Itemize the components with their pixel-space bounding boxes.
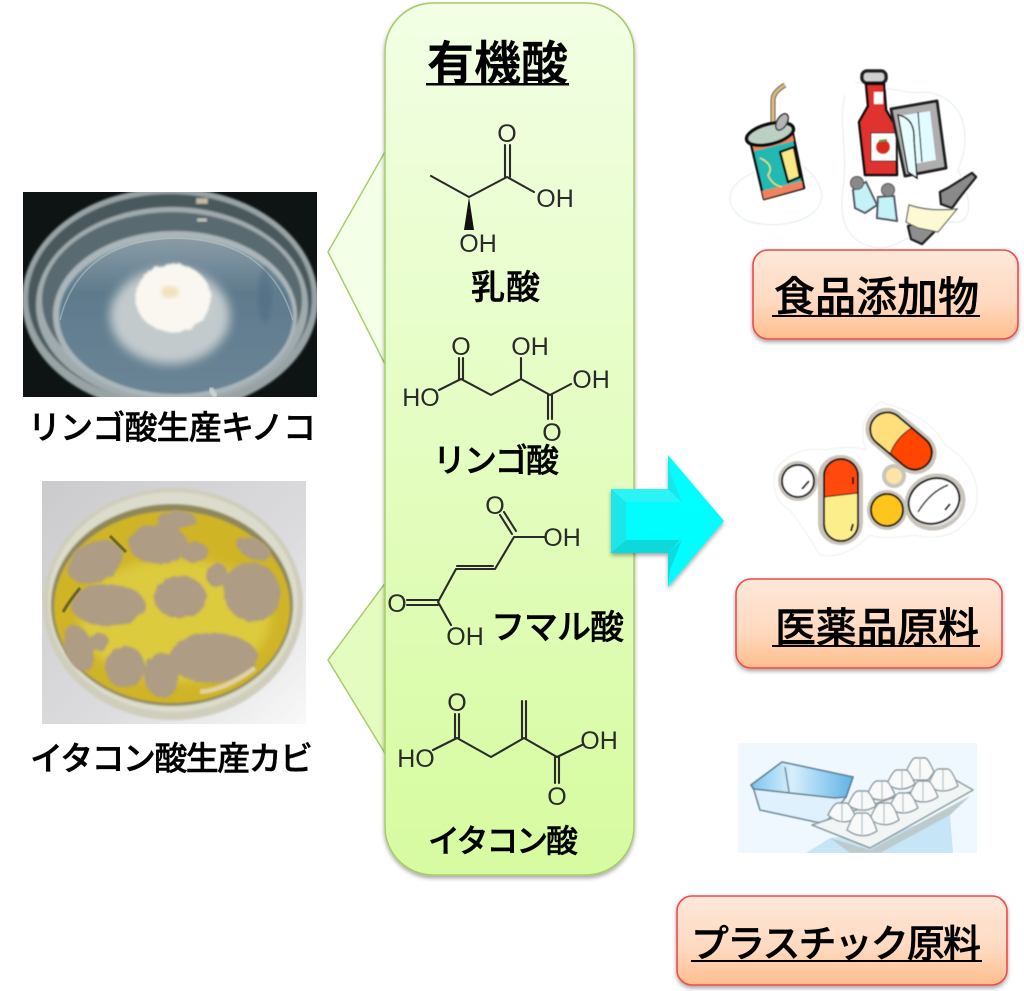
image: plastic tray and egg carton <box>738 743 977 853</box>
box: plastic raw materials <box>677 896 1007 985</box>
structure: itaconic acid: HO <box>397 745 435 773</box>
box: pharmaceutical raw materials <box>736 579 1002 668</box>
panel: organic acids <box>385 3 634 875</box>
icon: food and drink clip art <box>730 71 976 248</box>
salt and pepper shakers <box>850 176 897 221</box>
label: malic acid: リンゴ酸 <box>433 442 559 479</box>
egg carton <box>812 758 973 853</box>
label: lactic acid: 乳酸 <box>471 269 540 307</box>
faint outline <box>774 402 977 556</box>
structure: malic acid: OH <box>511 333 549 361</box>
structure: malic acid: OH <box>572 366 610 394</box>
label: fumaric acid: フマル酸 <box>491 609 624 647</box>
structure: malic acid: O <box>542 419 562 447</box>
photo: itaconic acid mold dish <box>42 481 306 724</box>
arrow: to applications <box>611 455 724 587</box>
structure: malic acid: HO <box>402 384 440 412</box>
structure: malic acid <box>402 333 610 447</box>
fork and napkin <box>906 173 976 244</box>
small pill <box>884 466 904 486</box>
heading: organic acid: 有機酸 <box>427 37 568 90</box>
box: pharmaceutical raw materials: 医薬品原料 <box>775 605 979 651</box>
box: food additives <box>753 250 1018 339</box>
structure: fumaric acid <box>387 492 581 651</box>
callout wedge: top <box>328 150 386 366</box>
faint outlines <box>730 82 969 248</box>
caption: itaconic acid mold: イタコン酸生産カビ <box>30 740 313 777</box>
plastic tray <box>751 762 853 824</box>
structure: lactic acid <box>431 120 574 258</box>
ketchup bottle <box>859 71 897 175</box>
structure: itaconic acid: O <box>547 783 567 811</box>
structure: itaconic acid <box>397 689 618 811</box>
structure: lactic acid: O <box>497 120 517 148</box>
photo: malic acid mushroom dish <box>22 188 318 412</box>
structure: fumaric acid: OH <box>543 524 581 552</box>
box: plastic raw materials: プラスチック原料 <box>691 924 981 966</box>
callout wedge: bottom <box>328 582 386 755</box>
vertical capsule <box>818 455 863 545</box>
white pill <box>778 461 818 501</box>
panel background <box>385 3 634 875</box>
orange pill <box>867 490 907 530</box>
diagonal capsule <box>857 399 945 483</box>
caption: malic acid mushroom: リンゴ酸生産キノコ <box>28 409 316 446</box>
structure: lactic acid: OH <box>536 185 574 213</box>
structure: malic acid: O <box>451 333 471 361</box>
napkin holder <box>891 101 946 178</box>
box: food additives: 食品添加物 <box>774 274 979 320</box>
structure: lactic acid: OH <box>459 230 497 258</box>
icon: medicine pills <box>774 399 977 556</box>
soda can <box>744 85 804 199</box>
structure: itaconic acid: O <box>447 689 467 717</box>
label: itaconic acid: イタコン酸 <box>428 823 578 859</box>
structure: itaconic acid: OH <box>580 727 618 755</box>
tablet <box>895 464 975 540</box>
structure: fumaric acid: OH <box>446 623 484 651</box>
structure: fumaric acid: O <box>485 492 505 520</box>
structure: fumaric acid: O <box>387 590 407 618</box>
